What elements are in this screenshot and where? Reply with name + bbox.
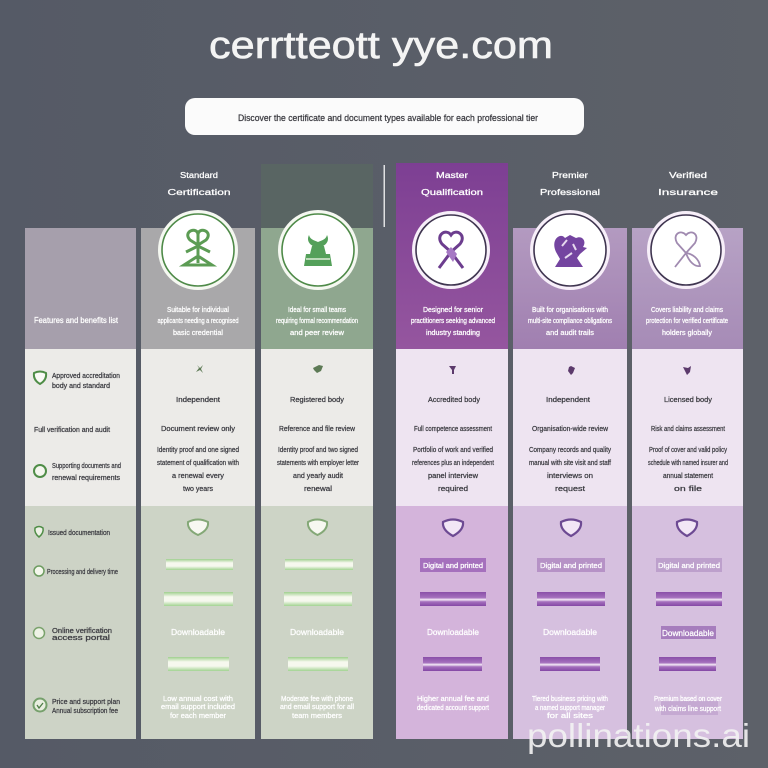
row label: lower 3: access portal bbox=[52, 635, 111, 642]
cell text block: two years bbox=[183, 486, 213, 493]
row label: lower 1: Issued documentation bbox=[48, 530, 110, 537]
icon: small mark bbox=[449, 366, 456, 374]
column headings: Standard bbox=[180, 171, 218, 180]
bar 2 bbox=[420, 592, 486, 606]
panel: purple column 3 bbox=[632, 228, 743, 739]
column heading bbox=[421, 171, 483, 197]
row label: item 3 bbox=[52, 463, 121, 482]
footer text: email support included bbox=[161, 704, 235, 711]
column summary bbox=[646, 307, 728, 337]
cell text block: Registered body bbox=[290, 397, 345, 404]
cell text block: Portfolio of work and verified bbox=[413, 447, 493, 454]
row label: item 1 bbox=[52, 373, 120, 390]
bar 1 bbox=[656, 558, 722, 572]
icon: shield bbox=[677, 520, 697, 536]
column summary: applicants needing a recognised bbox=[158, 318, 239, 325]
footer text: and email support for all bbox=[280, 704, 354, 711]
row label: item 1: body and standard bbox=[52, 383, 110, 390]
bar 3 bbox=[288, 657, 348, 671]
bar 3 bbox=[423, 657, 482, 671]
row label: lower 3 bbox=[52, 628, 112, 642]
bar 1 bbox=[166, 559, 233, 570]
column summary: Designed for senior bbox=[423, 307, 484, 314]
row label: item 2: Full verification and audit bbox=[34, 427, 110, 434]
cell text block: and yearly audit bbox=[293, 473, 343, 480]
bar 1 bbox=[420, 558, 486, 572]
icon: shield bbox=[561, 520, 581, 536]
cell text block: Identity proof and one signed bbox=[157, 447, 239, 454]
icon: shield bbox=[443, 520, 463, 536]
footer text: Tiered business pricing with bbox=[532, 696, 608, 703]
panel: purple column 1 bbox=[396, 163, 508, 739]
icon: small mark bbox=[313, 365, 323, 373]
column summary: Covers liability and claims bbox=[651, 307, 723, 314]
panel: purple column 2 bbox=[513, 228, 627, 739]
column summary: practitioners seeking advanced bbox=[411, 318, 495, 325]
cell text block bbox=[648, 397, 728, 493]
column summary bbox=[411, 307, 495, 337]
footer text: Moderate fee with phone bbox=[281, 696, 353, 703]
column headings: Recommendation bbox=[281, 188, 359, 197]
cell text block: Accredited body bbox=[428, 397, 481, 404]
column headings bbox=[168, 171, 719, 197]
icon: green emblem 1 bbox=[158, 210, 238, 290]
cell text block: Proof of cover and valid policy bbox=[649, 447, 727, 454]
icon: green emblem 2 bbox=[278, 210, 358, 290]
cell text block: Organisation-wide review bbox=[532, 426, 609, 433]
bar 2 bbox=[284, 592, 352, 606]
footer text bbox=[417, 696, 489, 712]
cell text block: Independent bbox=[176, 397, 220, 404]
cell text block: Identity proof and two signed bbox=[278, 447, 358, 454]
bar label: Downloadable bbox=[662, 629, 715, 638]
row label: item 3: renewal requirements bbox=[52, 475, 121, 482]
icon: purple emblem 3 bbox=[647, 211, 725, 289]
bar 2 bbox=[537, 592, 605, 606]
column summary: requiring formal recommendation bbox=[276, 318, 358, 325]
cell text block: panel interview bbox=[428, 473, 479, 480]
title: cerrtteott yye.com bbox=[209, 25, 553, 67]
cell text block bbox=[157, 397, 239, 493]
subtitle pill bbox=[185, 98, 584, 135]
bar label: Downloadable bbox=[171, 628, 226, 637]
column summary: and peer review bbox=[290, 330, 345, 337]
bar 3 bbox=[659, 657, 716, 671]
bar 1: Digital and printed bbox=[423, 563, 483, 570]
column summary: protection for verified certificate bbox=[646, 318, 728, 325]
bar 1: Digital and printed bbox=[658, 563, 720, 570]
panel: green column 1 bbox=[141, 228, 255, 739]
column summary: holders globally bbox=[662, 330, 712, 337]
icon: lower check bbox=[34, 698, 46, 712]
footer text: for all sites bbox=[547, 713, 594, 720]
bar label: Downloadable bbox=[543, 628, 598, 637]
footer text bbox=[532, 696, 608, 720]
footer text: Higher annual fee and bbox=[417, 696, 489, 703]
column summary: Built for organisations with bbox=[532, 307, 608, 314]
bar label: Downloadable bbox=[290, 628, 345, 637]
cell text block: manual with site visit and staff bbox=[529, 460, 611, 467]
column summary bbox=[276, 307, 358, 337]
footer text bbox=[654, 696, 723, 715]
bar label: Downloadable bbox=[427, 628, 480, 637]
row label: lower 4 bbox=[52, 699, 120, 715]
column summary: multi-site compliance obligations bbox=[528, 318, 612, 325]
bar 1 bbox=[285, 559, 353, 570]
row label: lower 4: Price and support plan bbox=[52, 699, 120, 706]
column headings: Certification bbox=[168, 188, 230, 197]
watermark: pollinations.ai bbox=[527, 717, 750, 754]
column summary: and audit trails bbox=[546, 330, 595, 337]
icon: purple emblem 1 bbox=[412, 211, 490, 289]
bar label bbox=[661, 626, 716, 639]
bar 1: Digital and printed bbox=[540, 563, 602, 570]
cell text block: references plus an independent bbox=[412, 460, 494, 467]
footer text: for each member bbox=[170, 713, 227, 720]
row label: lower 4: Annual subscription fee bbox=[52, 708, 118, 715]
cell text block: Company records and quality bbox=[529, 447, 611, 454]
cell text block: interviews on bbox=[547, 473, 593, 480]
cell text block bbox=[277, 397, 360, 493]
column headings: Premier bbox=[552, 171, 588, 180]
cell text block: statement of qualification with bbox=[157, 460, 239, 467]
footer text: dedicated account support bbox=[417, 705, 489, 712]
bar 2 bbox=[656, 592, 722, 606]
cell text block: Document review only bbox=[161, 426, 236, 433]
bar 3 bbox=[540, 657, 600, 671]
column headings: Professional bbox=[540, 188, 600, 197]
icon: small mark bbox=[683, 366, 691, 375]
cell text block: annual statement bbox=[663, 473, 713, 480]
row label: lower 2: Processing and delivery time bbox=[47, 569, 118, 576]
cell text block: on file bbox=[674, 486, 702, 493]
panel: green column 2 bbox=[261, 164, 373, 739]
bar 2 bbox=[164, 592, 233, 606]
cell text block: statements with employer letter bbox=[277, 460, 360, 467]
panel: label column bbox=[25, 228, 136, 739]
column summary: basic credential bbox=[173, 330, 223, 337]
column headings: Enhanced bbox=[296, 171, 344, 180]
cell text block: Risk and claims assessment bbox=[651, 426, 725, 433]
footer text: Low annual cost with bbox=[163, 696, 233, 703]
footer text: team members bbox=[292, 713, 343, 720]
cell text block: schedule with named insurer and bbox=[648, 460, 728, 467]
footer text: with claims line support bbox=[654, 706, 721, 713]
row label: header: Features and benefits list bbox=[34, 316, 119, 325]
icon: lower ring 1 bbox=[35, 526, 43, 537]
icon: small mark bbox=[568, 366, 575, 375]
cell text block: required bbox=[438, 486, 468, 493]
column heading: Master bbox=[436, 171, 468, 180]
icon: small mark bbox=[196, 365, 203, 373]
footer text: a named support manager bbox=[535, 705, 606, 712]
subtitle pill: Discover the certificate and document types available for each professional tier bbox=[238, 113, 538, 123]
column summary: Ideal for small teams bbox=[288, 307, 346, 314]
cell text block bbox=[529, 397, 611, 493]
cell text block: request bbox=[555, 486, 585, 493]
icon: row ring 1 bbox=[34, 372, 46, 384]
column summary bbox=[158, 307, 239, 337]
cell text block: a renewal every bbox=[172, 473, 225, 480]
icon: shield bbox=[308, 520, 327, 535]
cell text block: Full competence assessment bbox=[414, 426, 492, 433]
row label: lower 3: Online verification bbox=[52, 628, 112, 635]
bar 3 bbox=[168, 657, 229, 671]
icon: shield bbox=[188, 520, 208, 535]
icon: row ring 2 bbox=[34, 465, 46, 477]
column summary: Suitable for individual bbox=[167, 307, 229, 314]
footer text: Premium based on cover bbox=[654, 696, 723, 703]
divider between green and purple groups bbox=[384, 165, 385, 227]
icon: purple emblem 2 bbox=[530, 210, 610, 290]
column heading: Qualification bbox=[421, 188, 483, 197]
row label: item 1: Approved accreditation bbox=[52, 373, 120, 380]
cell text block: Reference and file review bbox=[279, 426, 356, 433]
cell text block: Independent bbox=[546, 397, 590, 404]
column summary bbox=[528, 307, 612, 337]
bar 1 bbox=[537, 558, 605, 572]
icon: lower ring 2 bbox=[34, 566, 44, 576]
icon: lower ring 3 bbox=[34, 628, 44, 638]
column headings: Insurance bbox=[658, 188, 719, 197]
column headings: Verified bbox=[669, 171, 707, 180]
cell text block bbox=[412, 397, 494, 493]
cell text block: renewal bbox=[304, 486, 333, 493]
footer text bbox=[280, 696, 354, 720]
row label: item 3: Supporting documents and bbox=[52, 463, 121, 470]
column summary: industry standing bbox=[426, 330, 480, 337]
cell text block: Licensed body bbox=[664, 397, 713, 404]
footer text bbox=[161, 696, 235, 720]
